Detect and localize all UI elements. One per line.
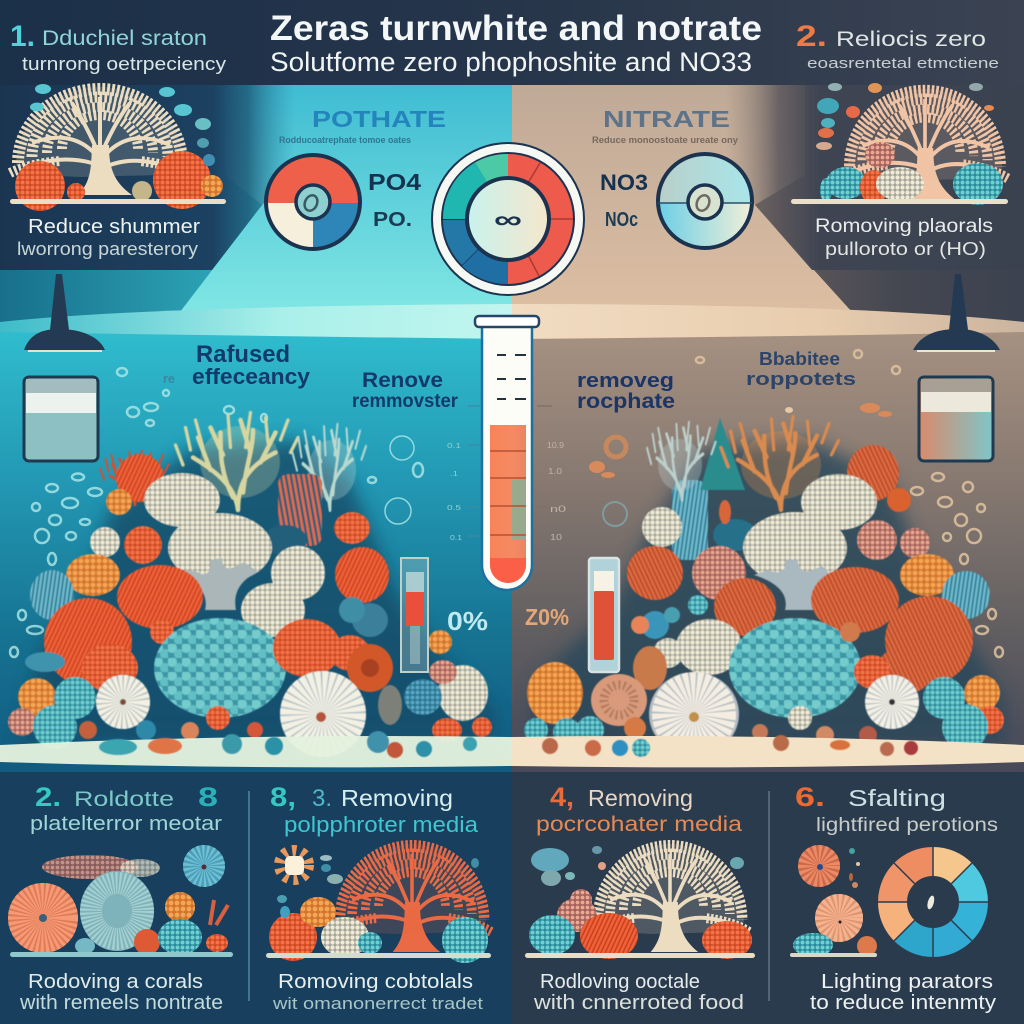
- tank box: left: [24, 377, 98, 461]
- bubbles: nitrate side: [603, 350, 1003, 657]
- bottom band: left: [0, 772, 512, 1024]
- icon: fan corals: [790, 845, 877, 957]
- coral: red branch: [100, 450, 169, 505]
- panel: bottom step A: [8, 782, 233, 1014]
- coral: group of small mounds: [66, 489, 370, 596]
- caption: wit omanonerrect tradet: [272, 994, 483, 1013]
- panel: bottom step D: [790, 782, 998, 1014]
- icon: peach tree coral with mixed corals: [791, 83, 1008, 205]
- tick marks: right of main tube: [537, 406, 566, 542]
- reef backing: nitrate side: [530, 440, 1005, 745]
- coral: cream mound top: [144, 473, 220, 527]
- labels: PO4: PO4: [368, 169, 421, 195]
- labels: NO3: [600, 170, 648, 231]
- reef: phosphate side corals: [8, 412, 492, 757]
- pebbles: reef foot: [624, 717, 877, 744]
- caption: [19, 971, 223, 1014]
- section label: phosphate: Rodducoatrephate tomoe oates: [279, 135, 411, 145]
- coral: cream mound top: [801, 474, 877, 530]
- heading: 4,: [550, 782, 574, 812]
- heading: 8: [198, 782, 218, 812]
- water surface: nitrate side: [512, 304, 1024, 339]
- value label: Z0%: Z0%: [525, 604, 569, 630]
- heading: step 2: 2.: [796, 20, 827, 53]
- coral: orange fan right: [335, 547, 389, 603]
- labels: NO3: NOc: [605, 209, 638, 231]
- tick marks: right of main tube: 1.0: [548, 467, 563, 476]
- water body: phosphate side: [0, 332, 512, 772]
- coral: orange double fan: [811, 567, 899, 633]
- coral: cream mound right: [271, 546, 325, 600]
- heading: step 1: Dduchiel sraton: [42, 27, 207, 50]
- sand: phosphate side: [0, 736, 512, 767]
- heading: 3.: [312, 785, 332, 812]
- caption: [272, 971, 483, 1013]
- lamp: left: [24, 274, 105, 352]
- orange drifting shells: nitrate side: [589, 403, 892, 478]
- gauge: central zero indicator: ∞: [494, 206, 522, 234]
- notes: phosphate side water: effeceancy: [192, 364, 311, 389]
- labels: PO4: [368, 169, 421, 231]
- heading: 8,: [270, 782, 296, 812]
- notes: phosphate side water: Renove: [362, 369, 443, 392]
- panel: bottom step C: [525, 782, 755, 1014]
- heading: 6.: [795, 782, 825, 812]
- heading: Roldotte: [74, 788, 174, 811]
- heading: step 2: Reliocis zero: [836, 28, 986, 51]
- divider: bottom left: [248, 791, 250, 1001]
- sand: nitrate side: [512, 736, 1024, 767]
- coral: cream dotted: [692, 546, 746, 600]
- tank box: right: [919, 377, 993, 461]
- caption: Lighting parators: [821, 971, 993, 993]
- panel: step 2 reduce zero: [725, 20, 1024, 270]
- notes: phosphate side water: Rafused: [196, 341, 290, 368]
- main test tube: [475, 316, 539, 590]
- heading: step 2: [796, 20, 999, 72]
- heading: Sfalting: [848, 785, 946, 811]
- section label: nitrate: Reduce monoostoate ureate ony: [592, 135, 738, 145]
- reef: nitrate side corals: [524, 416, 1004, 756]
- upper backdrop base: nitrate side: [512, 85, 1024, 335]
- title: [270, 9, 762, 77]
- divider: bottom right: [768, 791, 770, 1001]
- pie chart: phosphate: [266, 155, 360, 249]
- coral: red brush: [847, 445, 899, 501]
- water body: nitrate side: [512, 332, 1024, 772]
- heading: Removing: [341, 785, 453, 811]
- heading: platelterror meotar: [30, 813, 222, 835]
- coral: teal feather: [942, 571, 990, 619]
- caption: [533, 971, 744, 1014]
- coral: small orange flower: [887, 488, 911, 512]
- heading: [30, 782, 222, 835]
- heading: 2.: [35, 782, 61, 812]
- caption: step 2: [815, 216, 993, 259]
- coral: white fan large: [280, 671, 366, 757]
- heading: step 2: eoasrentetal etmctiene: [807, 55, 999, 72]
- heading: lightfired perotions: [816, 815, 998, 836]
- caption: step 1: lworrong paresterory: [17, 239, 198, 259]
- coral: striped column: [278, 474, 322, 546]
- pebbles over sand: nitrate: [542, 735, 918, 757]
- coral: group of small mounds: [642, 500, 954, 596]
- caption: Rodloving ooctale: [540, 971, 700, 993]
- icon: fan corals and urchin: [8, 845, 233, 957]
- notes: phosphate side water: remmovster: [352, 391, 459, 412]
- header band: [0, 0, 1024, 86]
- caption: step 1: Reduce shummer: [28, 216, 200, 238]
- notes: nitrate side water: roppotets: [746, 369, 856, 389]
- upper backdrop base: phosphate side: [0, 85, 512, 335]
- bubbles: phosphate side: [10, 368, 423, 657]
- coral: green spire: [700, 418, 745, 490]
- coral: mixed left cluster: [524, 622, 890, 746]
- coral: small orange: [150, 620, 174, 644]
- gauge: central zero indicator: [432, 143, 584, 295]
- heading: step 1: turnrong oetrpeciency: [22, 54, 226, 74]
- caption: with remeels nontrate: [19, 992, 223, 1014]
- donut chart: lighting: [878, 840, 988, 957]
- upper light backdrop: phosphate side: [180, 85, 512, 312]
- pie chart: nitrate: [658, 154, 752, 248]
- pebbles over sand: phosphate: [99, 731, 477, 758]
- coral: pale branch: [647, 422, 716, 500]
- notes: nitrate side water: [577, 349, 856, 413]
- coral: pale sea plants: [292, 424, 366, 510]
- heading: Removing: [588, 785, 693, 811]
- tick marks: left of main tube: [447, 406, 480, 542]
- heading: step 1: 1.: [10, 20, 35, 53]
- section label: nitrate: NITRATE: [603, 106, 730, 132]
- icon: cream tree coral: [525, 844, 755, 959]
- coral: teal feather: [30, 570, 74, 620]
- coral: white fan small: [865, 675, 919, 729]
- coral: large orange: [44, 598, 138, 692]
- coral: large orange right: [877, 596, 973, 694]
- coral: big teal: [729, 618, 861, 718]
- tick marks: left of main tube: .1: [450, 471, 458, 478]
- caption: step 2: Romoving plaorals: [815, 216, 993, 237]
- title: Zeras turnwhite and notrate: [270, 9, 762, 48]
- caption: [810, 971, 996, 1014]
- icon: cream tree coral with orange corals: [10, 84, 226, 211]
- pebbles: reef foot: [136, 706, 263, 740]
- upper light backdrop: nitrate side: [512, 85, 852, 312]
- coral: left corner cluster: [8, 652, 97, 749]
- subtitle: Solutfome zero phophoshite and NO33: [270, 47, 752, 77]
- caption: step 1: [17, 216, 200, 259]
- coral: cream round: [676, 619, 742, 675]
- tick marks: right of main tube: 10: [550, 533, 563, 542]
- notes: phosphate side water: re: [163, 371, 175, 386]
- value label: 0%: 0%: [447, 606, 488, 636]
- caption: step 2: pulloroto or (HO): [825, 239, 986, 259]
- coral: mixed right cluster: [330, 597, 492, 742]
- coral: big cream tree: [743, 512, 847, 610]
- coral: big cream tree: [168, 513, 272, 610]
- tick marks: left of main tube: 0.5: [447, 505, 461, 512]
- coral: orange dotted mound: [273, 619, 341, 677]
- notes: nitrate side water: Bbabitee: [759, 349, 840, 369]
- water surface: phosphate side: [0, 304, 512, 339]
- reef backing: phosphate side: [20, 440, 495, 745]
- coral: orange tree: [721, 416, 839, 510]
- coral: cream mound lower: [241, 583, 305, 637]
- caption: to reduce intenmty: [810, 992, 996, 1014]
- section label: phosphate: [279, 106, 446, 145]
- notes: nitrate side water: rocphate: [577, 390, 675, 413]
- panel: step 1 reduce skimmer: [0, 20, 295, 270]
- coral: orange coarse mound: [714, 578, 776, 636]
- tick marks: left of main tube: 0.1: [447, 443, 461, 450]
- caption: Rodoving a corals: [28, 971, 203, 993]
- icon: orange tree coral and sun: [266, 844, 491, 963]
- small test tube: nitrate side: [589, 558, 619, 672]
- coral: pale tree: [176, 412, 298, 510]
- coral: orange fan left: [117, 565, 203, 629]
- panel: bottom step B: [266, 782, 491, 1013]
- heading: pocrcohater media: [536, 813, 742, 836]
- notes: nitrate side water: removeg: [577, 370, 674, 392]
- coral: blue pebbles: [631, 595, 708, 639]
- coral: striped teal: [672, 480, 708, 560]
- caption: Romoving cobtolals: [278, 971, 473, 993]
- section label: nitrate: [592, 106, 738, 145]
- heading: [270, 782, 479, 837]
- coral: white fan large: [649, 672, 739, 756]
- coral: small pale mound: [788, 706, 812, 730]
- coral: teal right pair: [923, 675, 1004, 750]
- heading: [795, 782, 998, 836]
- small test tube: phosphate side: [401, 558, 428, 672]
- tick marks: right of main tube: n0: [550, 504, 566, 514]
- heading: [536, 782, 742, 836]
- labels: PO4: PO.: [373, 209, 412, 231]
- tick marks: right of main tube: 10.9: [547, 441, 565, 450]
- heading: step 1: [10, 20, 226, 74]
- lamp: right: [913, 274, 1000, 352]
- labels: NO3: NO3: [600, 170, 648, 195]
- section label: phosphate: POTHATE: [312, 106, 446, 132]
- heading: polpphroter media: [284, 812, 479, 837]
- coral: white fan small: [96, 675, 150, 729]
- caption: with cnnerroted food: [533, 992, 744, 1014]
- notes: phosphate side water: [163, 341, 459, 412]
- tick marks: left of main tube: 0.1: [450, 535, 462, 542]
- coral: orange fan: [627, 546, 683, 600]
- bottom band: right: [512, 772, 1024, 1024]
- coral: big teal: [154, 618, 286, 718]
